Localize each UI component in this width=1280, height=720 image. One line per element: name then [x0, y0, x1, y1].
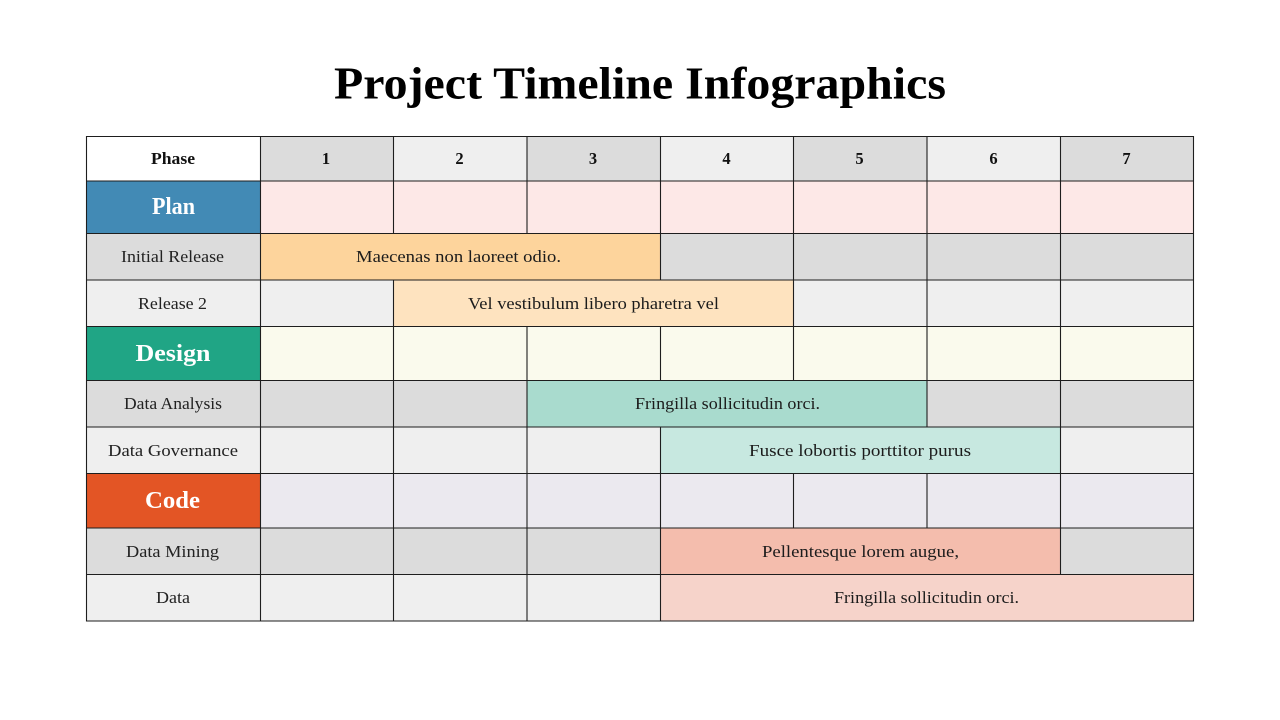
- row: Data Mining: Pellentesque lorem augue,: [762, 542, 959, 561]
- row: Data Governance: Fusce lobortis porttitor purus: [749, 441, 971, 460]
- row: Data Mining: [86, 528, 1194, 574]
- row: Data: Data: [156, 588, 190, 607]
- row: Data: Fringilla sollicitudin orci.: [834, 588, 1019, 607]
- header row: 4: [722, 149, 731, 168]
- row: Release 2: [86, 280, 1194, 326]
- header row: 6: [989, 149, 998, 168]
- header row: 2: [455, 149, 464, 168]
- row: Data Analysis: Fringilla sollicitudin orci.: [635, 394, 820, 413]
- panel: Plan: Plan: [152, 193, 195, 220]
- panel: Design: Design: [136, 340, 211, 367]
- row: Data Mining: Data Mining: [126, 542, 220, 561]
- row: Data Governance: [86, 427, 1194, 474]
- row: Data Analysis: Data Analysis: [124, 394, 222, 413]
- timeline table: [86, 136, 1194, 622]
- panel: Code: Code: [145, 487, 200, 514]
- row: Initial Release: Initial Release: [121, 247, 224, 266]
- panel: Plan: [86, 181, 1194, 234]
- header row: 3: [589, 149, 597, 168]
- panel: Design: [86, 326, 1194, 380]
- header row: 1: [322, 149, 330, 168]
- row: Release 2: Vel vestibulum libero pharetra vel: [468, 294, 719, 313]
- panel: Code: [86, 474, 1194, 528]
- header row: 5: [855, 149, 864, 168]
- row: Data Analysis: [86, 380, 1194, 427]
- header row: [86, 136, 1194, 181]
- row: Release 2: Release 2: [138, 294, 207, 313]
- title: Project Timeline Infographics: [334, 58, 946, 108]
- row: Data: [86, 574, 1194, 621]
- header row: Phase: [151, 149, 195, 168]
- row: Data Governance: Data Governance: [108, 441, 238, 460]
- row: Initial Release: Maecenas non laoreet odio.: [356, 247, 561, 266]
- header row: 7: [1122, 149, 1131, 168]
- row: Initial Release: [86, 234, 1194, 280]
